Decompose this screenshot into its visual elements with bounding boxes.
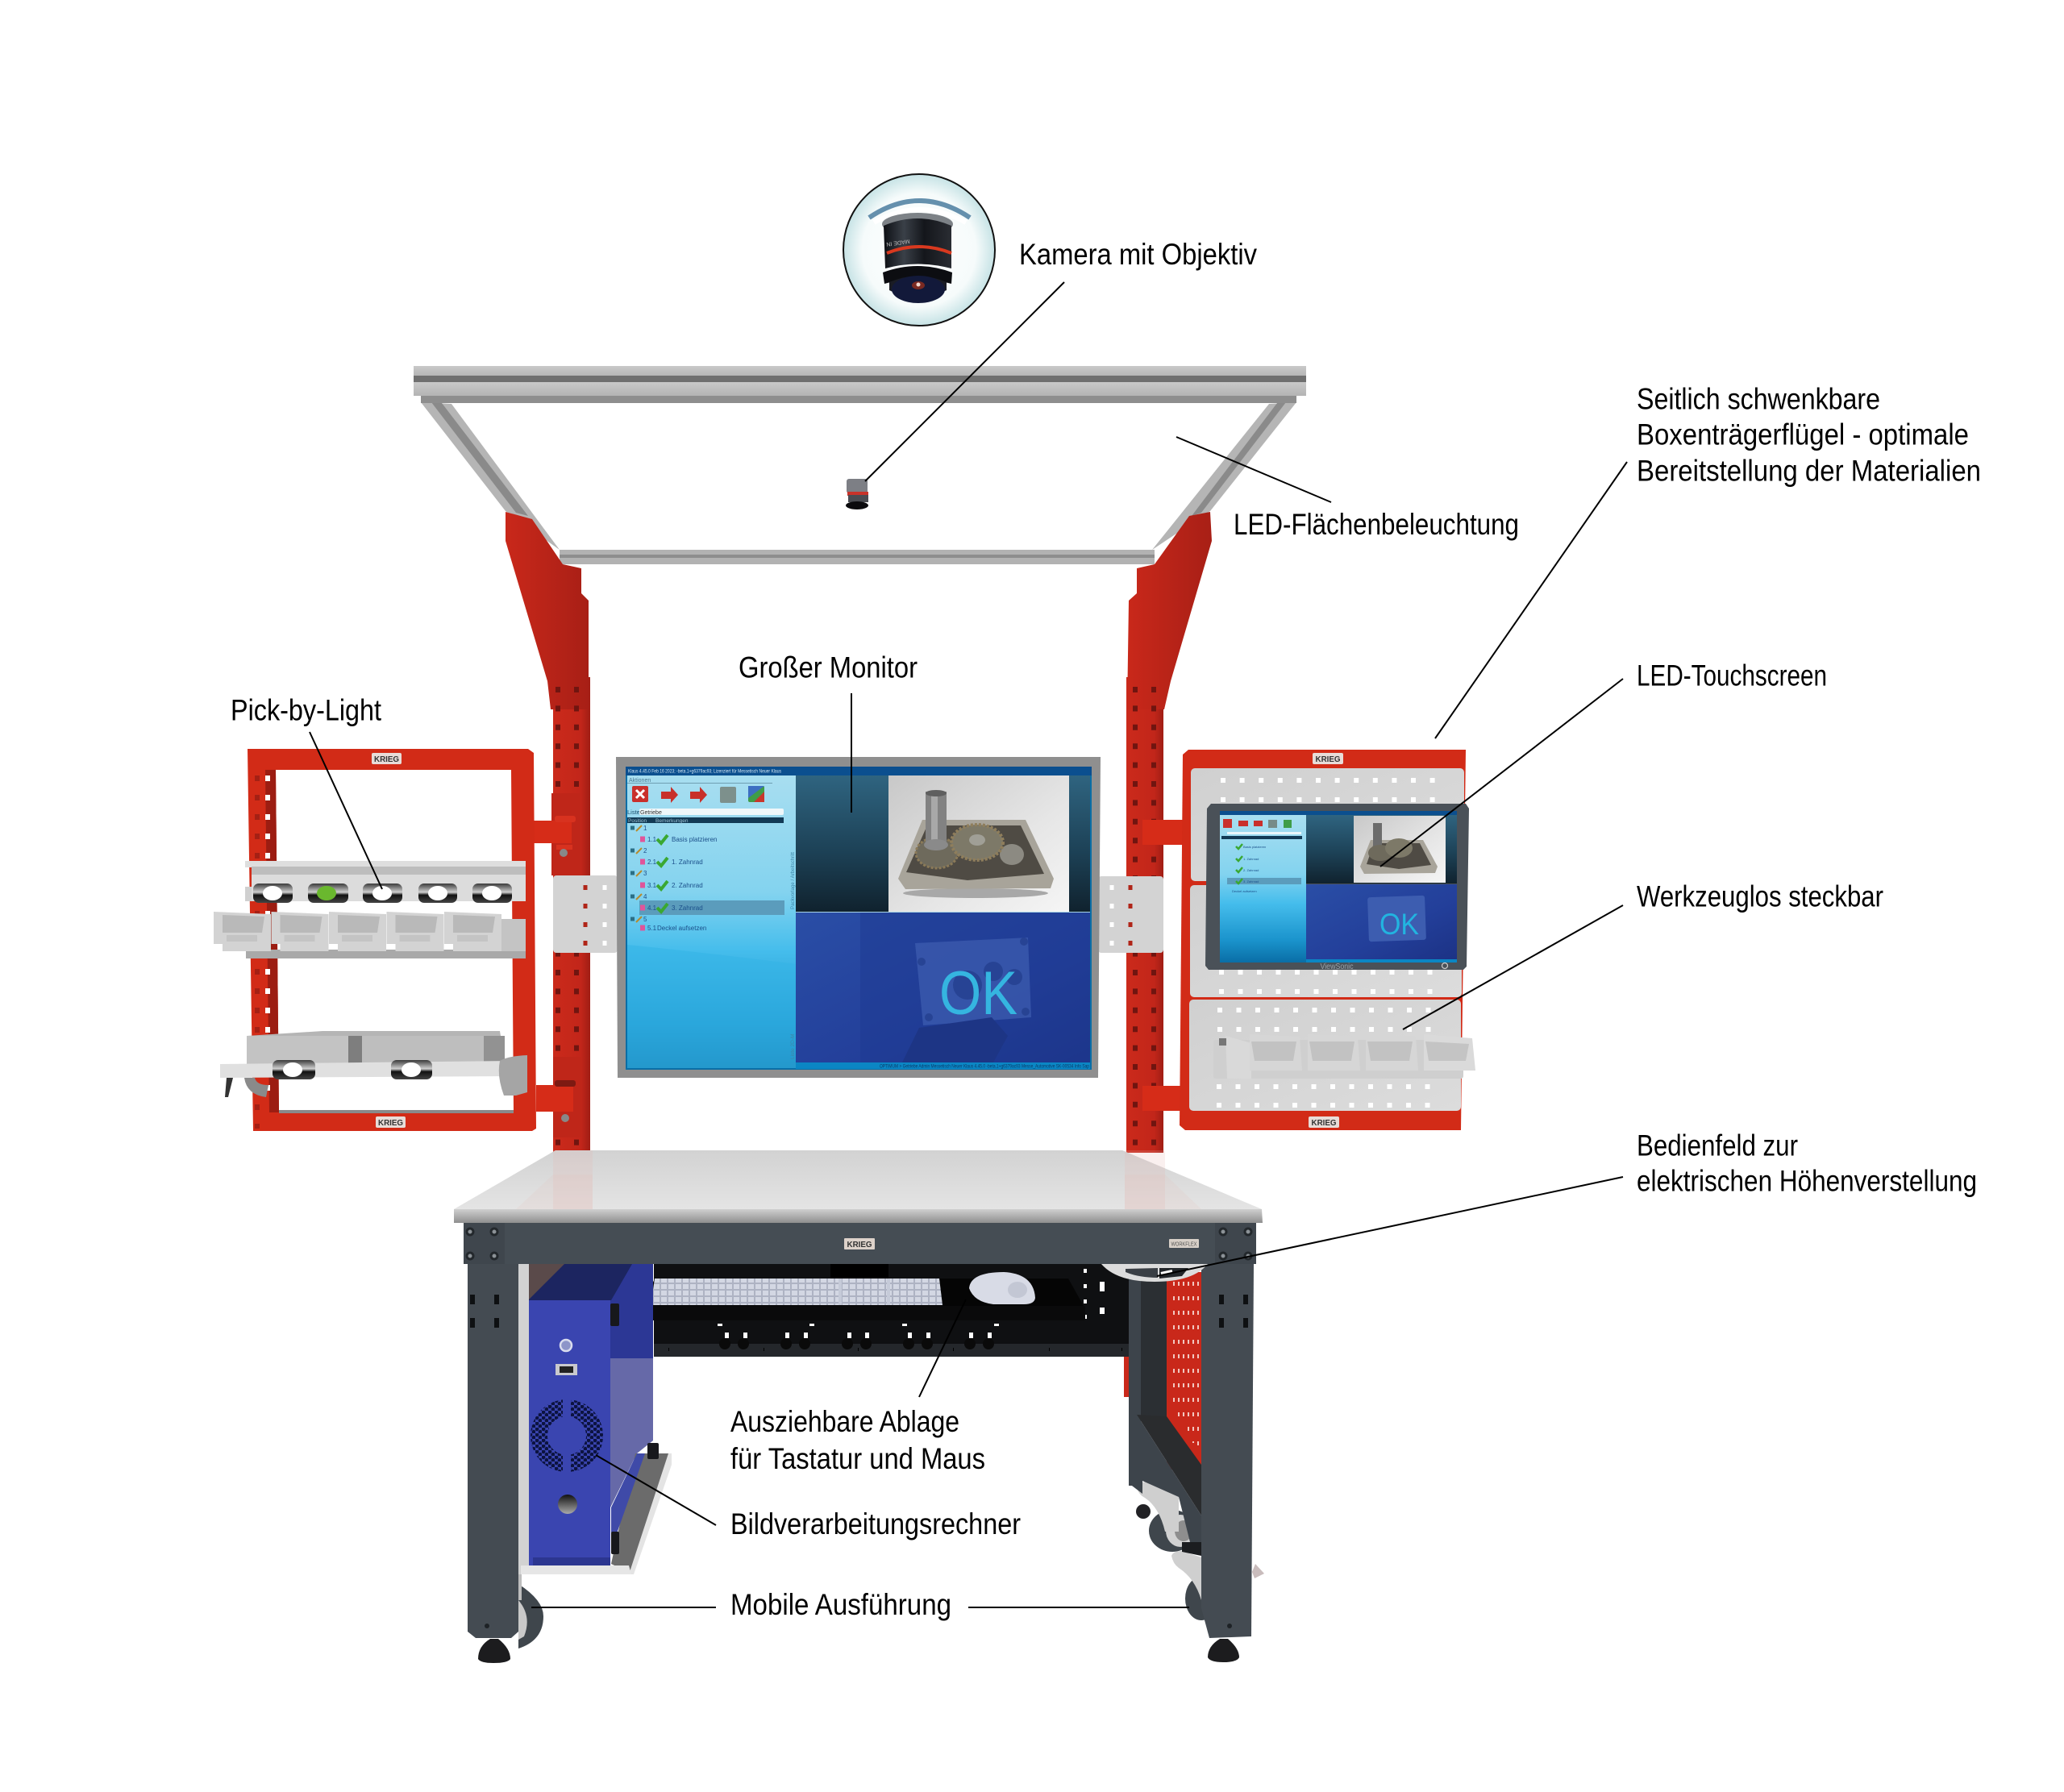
logo: WORKFLEX (1169, 1239, 1199, 1248)
mini screen list: 1. Zahnrad (1243, 857, 1259, 861)
mini screen list: Deckel aufsetzen (1232, 889, 1257, 893)
list rows: 2. Zahnrad (672, 882, 703, 889)
label: Pick-by-Light: Pick-by-Light (231, 693, 382, 727)
red frame right (1180, 750, 1466, 1130)
list rows: 2 (643, 847, 647, 854)
keyboard (651, 1279, 943, 1305)
leader line: mobile left (531, 1607, 716, 1608)
leader line: control panel (1157, 1177, 1623, 1276)
leader line: camera (865, 282, 1064, 481)
computer (Bildverarbeitungsrechner) (518, 1264, 672, 1574)
LED touchscreen: OK (1379, 908, 1419, 941)
leg holes (472, 1295, 1246, 1328)
left pane: action list: Aktionen (629, 778, 651, 784)
label: Großer Monitor: Großer Monitor (739, 651, 918, 684)
label: Bildverarbeitungsrechner: Bildverarbeitungsrechner (730, 1507, 1021, 1540)
right column with bracket (1126, 512, 1212, 1153)
label: Ausziehbare Ablage (730, 1405, 985, 1475)
logo: KRIEG on frame (844, 1238, 875, 1249)
label: Bedienfeld: Bedienfeld zur (1637, 1129, 1798, 1162)
status bar: OPTIMUM > Getriebe Admin Messetisch Neuer Klaus 4.45.0 -beta.1+g6379ac93 Messe_Automotive SK-00534 Info Sap (880, 1064, 1090, 1069)
list rows: 5 (643, 916, 647, 923)
list rows: 4 (643, 893, 647, 900)
mini screen list: Basis platzieren (1243, 845, 1266, 849)
round hole (558, 1495, 577, 1514)
large monitor (616, 757, 1101, 1078)
camera detail bubble: MADE IN (886, 238, 910, 247)
label: Seitlich schwenkbare Boxenträgerflügel: Seitlich schwenkbare (1637, 382, 1880, 416)
upper shelf (245, 861, 526, 901)
lower shelf with crates (220, 1031, 527, 1097)
top image pane (796, 775, 1090, 912)
leader line: side wings (1435, 462, 1627, 738)
leader line: computer (596, 1455, 716, 1525)
rail notches (719, 1338, 994, 1349)
logo: KRIEG right bottom: KRIEG (1311, 1119, 1337, 1128)
latches (610, 1303, 659, 1554)
right rear leg, red panel and casters (1129, 1264, 1217, 1620)
list rows: 4.1 (647, 904, 657, 912)
left pane: action list: Liste 2D-M (790, 1034, 796, 1059)
keyboard tray (643, 1272, 1085, 1320)
title bar: Klaus 4.45.0 Feb 16 2023; -beta.1+g6379ac93; Lizenziert für Messetisch Neuer Klaus (628, 769, 782, 774)
mouse (969, 1272, 1035, 1304)
label: Bedienfeld: elektrischen Höhenverstellung (1637, 1164, 1977, 1198)
label: LED-Touchscreen: LED-Touchscreen (1637, 659, 1827, 692)
leader line: pick-by-light (310, 732, 382, 889)
USB port (556, 1364, 577, 1375)
monitor mount plates (553, 875, 1163, 953)
list rows: Basis platzieren (672, 836, 717, 843)
logo: KRIEG: KRIEG (374, 755, 399, 764)
panel: left box-carrier wing (Pick-by-Light) (214, 749, 582, 1137)
pick-by-light sensors (253, 884, 512, 903)
list rows: 3 (643, 870, 647, 877)
logo: KRIEG (372, 753, 402, 764)
top aluminium frame: LED light (414, 366, 1306, 564)
leader line: toolless (1403, 905, 1623, 1029)
leader line: tray (919, 1299, 966, 1397)
red frame left (248, 749, 536, 1131)
gearbox photo (898, 790, 1054, 898)
panel: right box-carrier wing with pegboard (1142, 750, 1475, 1130)
mini screen list: 3. Zahnrad (1243, 879, 1259, 884)
list rows: 1.1 (647, 836, 657, 843)
status bar (796, 1062, 1090, 1069)
mini screen list (1232, 845, 1266, 893)
left pane: action list: Packvorlage / Arbeitschritt (790, 852, 796, 909)
logo: KRIEG right top (1313, 753, 1343, 764)
logo: KRIEG right top: KRIEG (1316, 755, 1341, 764)
leader line: touchscreen (1380, 679, 1623, 867)
label: Seitlich schwenkbare Boxenträgerflügel (1637, 382, 1981, 487)
logo: WORKFLEX: WORKFLEX (1171, 1241, 1197, 1248)
small camera (846, 479, 868, 509)
logo: KRIEG on frame: KRIEG (847, 1241, 872, 1249)
left pane: action list: Position (628, 818, 647, 824)
title bar (626, 767, 1092, 775)
list rows: 1 (643, 825, 647, 832)
leader line: mobile right (968, 1607, 1189, 1608)
label: Kamera mit Objektiv: Kamera mit Objektiv (1019, 238, 1257, 271)
casters and feet (478, 1564, 1264, 1663)
label: Seitlich schwenkbare Boxenträgerflügel: Bereitstellung der Materialien (1637, 455, 1981, 487)
left pane: action list: Getriebe (640, 810, 662, 816)
front caster (1171, 1551, 1217, 1620)
workbench: rear structure and drawer (654, 1264, 1136, 1397)
left pane: action list: Liste (627, 809, 640, 816)
left pane: action list (627, 775, 796, 1068)
tray mounting holes (718, 1324, 999, 1338)
LED touchscreen (1205, 804, 1469, 971)
hinge arms right (1142, 820, 1184, 1111)
leader line: LED light (1176, 437, 1331, 502)
bottom camera pane with OK (796, 913, 1090, 1062)
left column with bracket (506, 512, 590, 1153)
mini screen checks (1236, 844, 1242, 884)
list rows: 3. Zahnrad (672, 904, 703, 912)
list rows: 1. Zahnrad (672, 859, 703, 866)
left pane: action list: Bemerkungen (655, 818, 689, 824)
table top (454, 1150, 1263, 1223)
pegboards (1189, 768, 1464, 1111)
label: Ausziehbare Ablage: für Tastatur und Maus (730, 1442, 985, 1475)
table frame and legs (464, 1223, 1256, 1638)
list icons (657, 835, 668, 912)
list rows: 2.1 (647, 859, 657, 866)
height adjustment control panel (1101, 1264, 1208, 1282)
bottom camera pane with OK: OK (939, 959, 1017, 1028)
rear caster (1136, 1482, 1196, 1552)
small bins (1213, 1034, 1475, 1079)
list rows: Deckel aufsetzen (657, 925, 706, 932)
label: Seitlich schwenkbare Boxenträgerflügel: Boxenträgerflügel - optimale (1637, 418, 1969, 451)
power button (560, 1340, 572, 1351)
label: Bedienfeld (1637, 1129, 1977, 1198)
hinge arms left (531, 793, 582, 1137)
logo: KRIEG right bottom (1309, 1116, 1339, 1128)
label: Werkzeuglos steckbar: Werkzeuglos steckbar (1637, 880, 1883, 913)
leader line: monitor (851, 693, 852, 813)
frame bolts (467, 1229, 1251, 1259)
label: LED-Flächenbeleuchtung: LED-Flächenbeleuchtung (1234, 508, 1519, 541)
logo: KRIEG bottom (376, 1116, 406, 1128)
LED touchscreen: ViewSonic (1321, 963, 1353, 971)
logo: KRIEG bottom: KRIEG (378, 1119, 403, 1128)
camera detail bubble (843, 174, 995, 326)
mini screen list: 2. Zahnrad (1243, 868, 1259, 872)
list rows (643, 825, 717, 932)
label: Ausziehbare Ablage: Ausziehbare Ablage (730, 1405, 959, 1438)
list rows: 3.1 (647, 882, 657, 889)
fan grille (531, 1399, 603, 1473)
label: Mobile Ausführung: Mobile Ausführung (730, 1588, 951, 1621)
bins row (214, 912, 526, 958)
list rows: 5.1 (647, 925, 657, 932)
